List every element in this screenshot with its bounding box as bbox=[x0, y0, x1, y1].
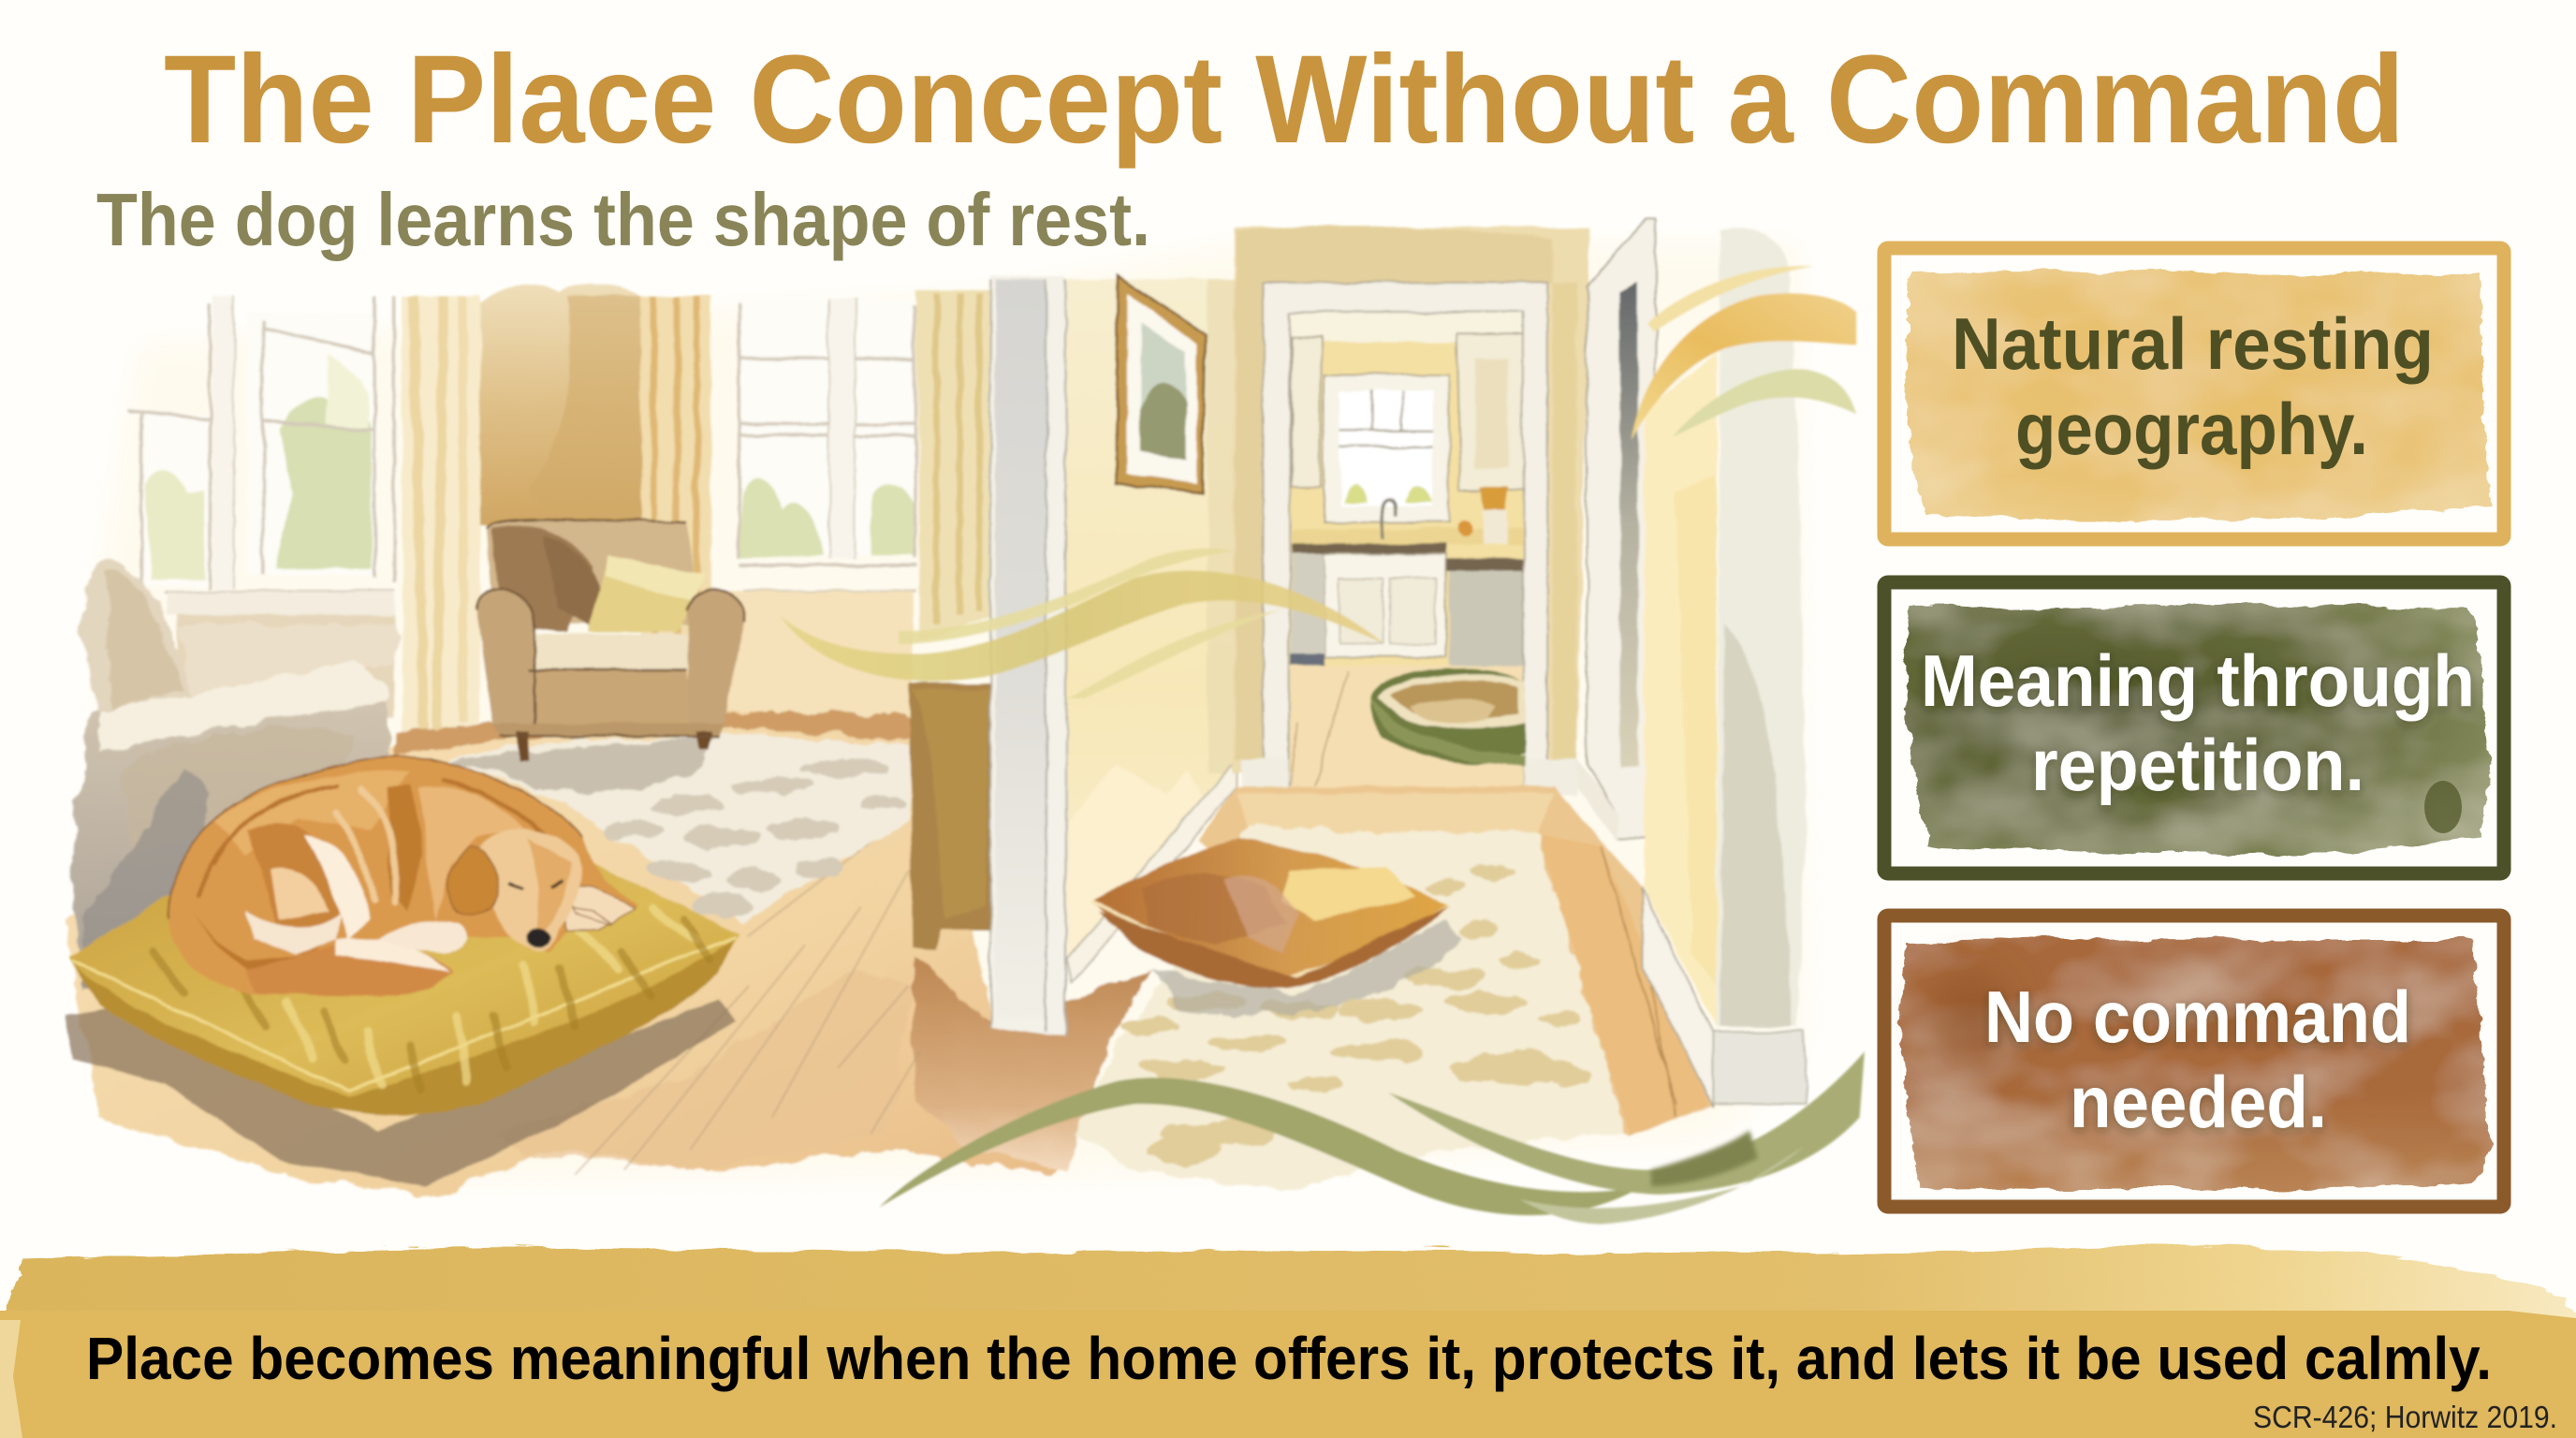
card text bbox=[1921, 639, 2475, 806]
cushion brush marks bbox=[200, 907, 696, 1084]
left brush streaks bbox=[0, 1320, 22, 1438]
card text: repetition. bbox=[2031, 724, 2364, 806]
dog body bbox=[169, 756, 640, 997]
card text: geography. bbox=[2015, 388, 2368, 470]
dog bed shadow bbox=[66, 999, 736, 1186]
left curtain bbox=[402, 296, 479, 740]
dark wash blot bbox=[2424, 781, 2462, 833]
kitchen window bbox=[1325, 374, 1449, 522]
title: The Place Concept Without a Command bbox=[164, 30, 2405, 169]
card frame gold bbox=[1884, 248, 2504, 539]
doorway to kitchen bbox=[1232, 227, 1590, 795]
bottom takeaway band bbox=[0, 1245, 2576, 1438]
upper right swirls bbox=[1632, 266, 1856, 440]
main brush stroke bbox=[0, 1311, 2576, 1438]
sleeping golden retriever bbox=[169, 756, 640, 997]
card: natural resting geography bbox=[1884, 248, 2504, 539]
lower wall between chair and pillar bbox=[711, 592, 914, 723]
illustration: watercolor home with dog resting on place bed bbox=[66, 218, 1865, 1224]
takeaway text: Place becomes meaningful when the home offers it, protects it, and lets it be used calmly. bbox=[86, 1325, 2492, 1392]
center window bbox=[736, 299, 916, 723]
shag rug bbox=[440, 734, 909, 923]
brown wall section bbox=[479, 283, 640, 526]
right wall bbox=[1645, 353, 1717, 1027]
center curtain bbox=[916, 289, 992, 640]
card: no command needed bbox=[1884, 916, 2504, 1207]
floorboard lines bbox=[575, 814, 920, 1175]
armchair bbox=[476, 520, 744, 762]
left window bbox=[128, 296, 394, 716]
right door casing and wall bbox=[1197, 218, 1807, 1137]
brown watercolor wash bbox=[1900, 938, 2490, 1191]
card frame brown bbox=[1884, 916, 2504, 1207]
subtitle: The dog learns the shape of rest. bbox=[96, 178, 1150, 261]
card text: No command bbox=[1984, 976, 2411, 1058]
sofa bbox=[72, 562, 394, 1003]
card text: needed. bbox=[2070, 1061, 2327, 1143]
card text bbox=[1984, 976, 2411, 1143]
small dog bed in kitchen bbox=[1369, 668, 1525, 766]
dog head bbox=[476, 829, 581, 951]
right curtain bbox=[640, 296, 711, 723]
left room windows and curtains bbox=[128, 283, 992, 740]
card text: Meaning through bbox=[1921, 639, 2475, 722]
front leg and paw bbox=[378, 921, 467, 953]
door casing bbox=[1264, 283, 1547, 792]
white door post bbox=[990, 276, 1068, 1036]
kitchen floor bbox=[1291, 666, 1525, 788]
brown cabinet block bbox=[910, 683, 990, 949]
framed picture bbox=[1117, 276, 1206, 492]
card: meaning through repetition bbox=[1884, 582, 2504, 873]
dog fur strokes bbox=[198, 781, 559, 903]
card text: Natural resting bbox=[1952, 302, 2434, 385]
gray trim wall bbox=[1717, 227, 1807, 1027]
wood floor bbox=[66, 710, 1150, 1195]
baseboard right bbox=[1643, 888, 1713, 1108]
golden place cushion bbox=[69, 838, 739, 1116]
hall runner rug bbox=[1076, 827, 1626, 1191]
wall wash bbox=[98, 243, 1804, 1183]
faucet and jar bbox=[1383, 500, 1397, 539]
dog eyes and nose bbox=[509, 881, 564, 888]
hallway wall and pillar bbox=[910, 276, 1240, 1036]
cabinets bbox=[1457, 333, 1525, 490]
hall floor bbox=[1197, 787, 1717, 1137]
hall wall bbox=[1066, 279, 1240, 961]
olive bottom swirls bbox=[879, 1051, 1865, 1224]
dark wash blot bbox=[1933, 971, 2008, 1061]
card text bbox=[1952, 302, 2434, 470]
baseboard bbox=[1068, 757, 1237, 982]
pale upper brush stroke bbox=[0, 1245, 2576, 1329]
counter and lower units bbox=[1291, 529, 1525, 546]
kitchen back wall bbox=[1290, 309, 1525, 670]
door surround wall bbox=[1232, 227, 1590, 772]
gold watercolor wash bbox=[1906, 270, 2490, 521]
olive watercolor wash bbox=[1904, 604, 2490, 854]
floor cushion in hallway bbox=[1090, 840, 1447, 990]
dog tail bbox=[246, 943, 455, 997]
casing bbox=[1587, 218, 1656, 838]
card frame olive bbox=[1884, 582, 2504, 873]
gold scent swirl bbox=[781, 549, 1384, 698]
